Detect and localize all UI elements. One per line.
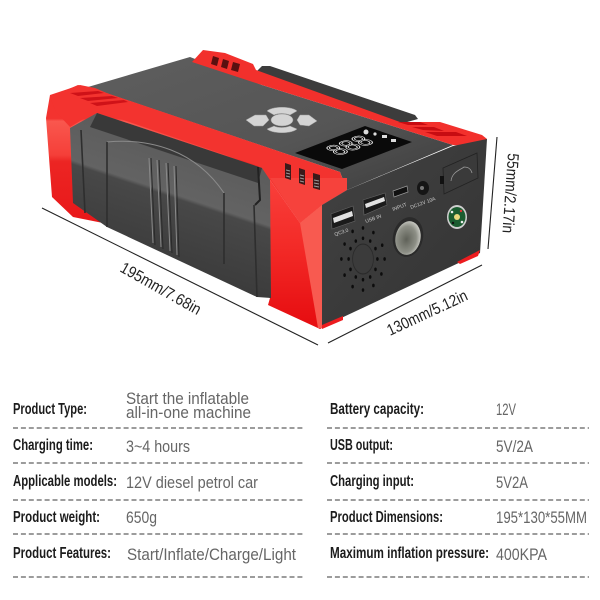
row: product weight: 650g [126,509,157,527]
row: product dimensions: Product Dimensions: [330,509,443,526]
row: charging input: 5V2A [496,474,528,492]
USB port in [363,193,387,225]
row: battery capacity: 12V [496,401,516,419]
handle [256,66,418,124]
LED display [295,126,412,169]
row: applicable models [13,473,258,492]
LED display: 888 [319,133,381,159]
row: product type: Product Type: [13,401,87,418]
spec table: left column [13,390,305,577]
USB port DC: QC3.0 [334,228,350,238]
small red feet on end face [322,250,480,329]
right red block highlight [270,178,347,223]
front top red band [50,85,347,223]
dimension: width [328,265,482,343]
row: USB output [330,437,533,456]
speaker grille [340,226,386,292]
row: USB output: USB output: [330,437,393,454]
USB port DC [331,206,355,238]
cover panel [440,153,478,194]
left red end cap [46,85,270,298]
row: product weight: Product weight: [13,509,100,526]
dimension: height [488,137,521,249]
right end face [322,139,487,327]
row: product features [13,545,296,564]
row: applicable models: Applicable models: [13,473,117,490]
dimension: length: 195mm/7.68in [117,260,204,319]
row: product type: all-in-one machine [126,404,251,422]
row: applicable models: 12V diesel petrol car [126,474,258,492]
compass [447,205,467,229]
row: battery capacity: Battery capacity: [330,401,424,418]
dimension: height: 55mm/2.17in [498,153,521,234]
row: USB output: 5V/2A [496,438,533,456]
row: product features: Start/Inflate/Charge/Light [127,546,296,564]
row: charging time [13,437,190,456]
right red block [268,180,322,329]
right top corner vents [398,122,467,136]
rear red strip [192,50,487,148]
row: maximum inflation pressure: 400KPA [496,546,547,564]
spec table: right column [327,401,589,577]
front black compartment [70,113,271,298]
row: maximum inflation pressure: Maximum inflation pressure: [330,545,489,562]
rear top vents [211,56,240,72]
USB port in: USB IN [365,213,383,225]
row: product type: Start the inflatable [126,390,249,408]
dimension: width: 130mm/5.12in [385,287,471,340]
row: charging input: Charging input: [330,473,414,490]
row: product dimensions [330,509,587,527]
keypad [246,107,317,133]
front vents [285,163,320,190]
row: charging input [330,473,528,492]
DC jack: DC12V 10A [410,196,437,211]
block light corner [300,205,322,328]
flashlight lens [389,214,427,260]
USB-C input [392,186,408,213]
row: charging time: Charging time: [13,437,93,454]
row: charging time: 3~4 hours [126,438,190,456]
front left top vents [70,91,128,106]
row: product features: Product Features: [13,545,111,562]
USB-C input: INPUT [392,202,408,213]
compartment top shadow band [90,113,262,183]
dimension: length [42,208,318,345]
top face [88,57,453,190]
row: battery capacity [330,401,516,419]
row: product type [13,390,251,422]
compartment latch outline [81,130,260,297]
DC jack [410,181,437,211]
product illustration: jump starter [46,50,487,329]
